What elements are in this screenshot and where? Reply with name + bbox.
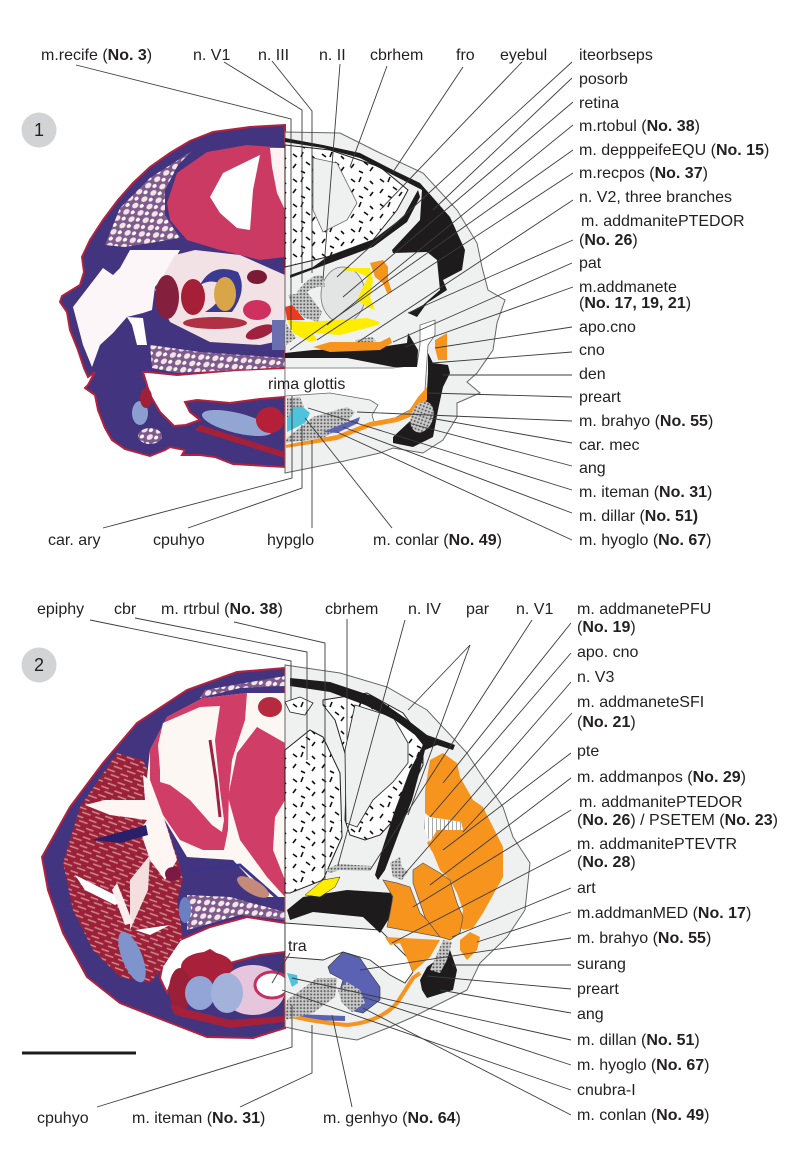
yellow muscle [305, 877, 340, 897]
label: cbr: cbr [114, 601, 137, 618]
label: m. addmanitePTEDOR: m. addmanitePTEDOR [579, 794, 743, 811]
label: m. depppeifeEQU: m. depppeifeEQU (No. 15) [579, 142, 769, 159]
label: ang: ang [577, 1006, 604, 1023]
label: m. conlan: m. conlan (No. 49) [577, 1107, 709, 1124]
eye ring [321, 267, 365, 323]
label: epiphy: epiphy [37, 601, 84, 618]
yellow muscles [287, 318, 380, 342]
orange muscles [370, 260, 392, 293]
mouth cavity [285, 923, 413, 983]
label: m. conlar: m. conlar (No. 49) [373, 532, 502, 549]
lower jaw cartilage [200, 405, 274, 441]
lower jaw lobe [132, 401, 148, 425]
label: m. addmanetePFU: m. addmanetePFU [577, 601, 711, 618]
label: m. addmanitePTEDOR: m. addmanitePTEDOR [581, 213, 745, 230]
panel number 2 [22, 648, 56, 682]
label: apo. cno: apo. cno [577, 644, 638, 661]
label: m. hyoglo: m. hyoglo (No. 67) [579, 532, 711, 549]
mouth cavity [285, 320, 435, 425]
label: tra: tra [288, 938, 307, 955]
label: iteorbseps: iteorbseps [579, 47, 653, 64]
label: m. addmanpos: m. addmanpos (No. 29) [577, 769, 746, 786]
label: n. V1: n. V1 [193, 47, 230, 64]
blue muscle [328, 952, 380, 1013]
label: ang: ang [579, 460, 606, 477]
stippled lower muscles [285, 407, 355, 443]
label: m. addmanetePFU [577, 601, 711, 636]
inner brain mass [228, 727, 285, 897]
labels panel 2 right [577, 601, 778, 1124]
white connective tissue [85, 775, 177, 880]
panel number 1 [22, 112, 56, 148]
label: m. hyoglo: m. hyoglo (No. 67) [577, 1057, 709, 1074]
label: cno: cno [579, 342, 605, 359]
blue cartilage [113, 928, 151, 986]
label: n. III: n. III [258, 47, 289, 64]
label: posorb: posorb [579, 71, 628, 88]
label: m.addmanMED: m.addmanMED (No. 17) [577, 905, 751, 922]
label: m.recpos: m.recpos (No. 37) [579, 165, 708, 182]
label: m. addmaneteSFI: m. addmaneteSFI [577, 694, 704, 711]
label: eyebul: eyebul [500, 47, 547, 64]
black parietal band [290, 678, 455, 880]
ventricle [210, 155, 260, 230]
label: n. V3: n. V3 [577, 669, 614, 686]
panel 1 schematic section [285, 132, 505, 473]
label: n. V1: n. V1 [516, 601, 553, 618]
label: cpuhyo: cpuhyo [37, 1110, 89, 1127]
blue muscle [323, 417, 360, 433]
label: cnubra-I: cnubra-I [577, 1082, 636, 1099]
leader lines panel 2 [90, 618, 572, 1115]
label: m. dillan: m. dillan (No. 51) [577, 1032, 700, 1049]
leader lines panel 1 [76, 61, 573, 540]
label: m. addmanitePTEDOR: (No. 26) [579, 232, 638, 249]
label: m. genhyo: m. genhyo (No. 64) [323, 1110, 461, 1127]
trachea [255, 972, 289, 998]
stippled tongue muscles [285, 978, 337, 1020]
black jaw cartilage [287, 890, 393, 933]
labels panel 1 right [579, 47, 769, 549]
label: m. addmanitePTEDOR: (No. 26) / PSETEM (No. 23) [577, 812, 778, 829]
white jaw joint space [73, 250, 180, 367]
red muscle [285, 305, 305, 320]
label: rima glottis: rima glottis [268, 376, 345, 393]
stippled eye muscles [288, 275, 325, 322]
panel 2 schematic section [285, 665, 530, 1040]
marrow [187, 895, 285, 930]
brain tissue [167, 145, 285, 260]
black cartilage band [285, 138, 465, 317]
black lower cartilage [420, 950, 457, 998]
label: car. ary: car. ary [48, 532, 100, 549]
label: preart: preart [577, 981, 619, 998]
jaw muscle [63, 753, 183, 983]
label: fro: fro [456, 47, 475, 64]
label: surang: surang [577, 956, 626, 973]
label: n. V2: n. V2, three branches [579, 189, 732, 206]
label: m. brahyo: m. brahyo (No. 55) [577, 930, 711, 947]
label: m.recife: m.recife (No. 3) [41, 47, 152, 64]
panel number 1: 1 [34, 120, 44, 140]
label: car. mec: car. mec [579, 437, 639, 454]
inner grey brain [313, 158, 357, 232]
cerebellum speckle [285, 730, 342, 893]
head silhouette [42, 668, 285, 1038]
label: m. iteman: m. iteman (No. 31) [579, 484, 712, 501]
labels panel 2 top [37, 601, 553, 618]
label: n. IV: n. IV [408, 601, 441, 618]
ventricle [158, 706, 224, 832]
label: m. dillar: m. dillar (No. 51) [579, 508, 698, 525]
upper jaw bone [150, 345, 285, 373]
label: m.rtobul: m.rtobul (No. 38) [579, 118, 700, 135]
label: pte: pte [577, 743, 599, 760]
label: pat: pat [579, 255, 602, 272]
label: par: par [466, 601, 490, 618]
tongue muscles [181, 952, 233, 982]
panel 1 histology section [60, 125, 285, 467]
cyan cartilage [287, 407, 310, 432]
label: art: art [577, 880, 596, 897]
panel 2 histology section [42, 668, 289, 1038]
label: preart: preart [579, 389, 621, 406]
cerebral hemisphere speckle [285, 145, 408, 267]
label: den: den [579, 366, 606, 383]
label: m. addmanetePFU: (No. 19) [577, 619, 636, 636]
panel number 2: 2 [34, 655, 44, 675]
outer pallium [150, 693, 247, 850]
eye region [155, 250, 285, 345]
labels panel 2 bottom [37, 938, 461, 1127]
stippled nerve [390, 857, 408, 880]
label: m.addmanete: (No. 17, 19, 21) [579, 295, 691, 312]
label: hypglo: hypglo [267, 532, 314, 549]
labels panel 1 top [41, 47, 547, 64]
label: m. addmaneteSFI [577, 694, 704, 731]
label: m. addmaneteSFI: (No. 21) [577, 714, 636, 731]
hatched pterygoid [424, 817, 463, 842]
label: cbrhem: cbrhem [325, 601, 378, 618]
label: m. addmanitePTEDOR [577, 794, 778, 829]
label: m. rtrbul: m. rtrbul (No. 38) [161, 601, 283, 618]
stippled brachiohyoid [430, 940, 452, 973]
label: cpuhyo: cpuhyo [153, 532, 205, 549]
orange adductor muscles [425, 753, 503, 930]
brain cavity background [147, 693, 285, 897]
labels panel 1 bottom [48, 376, 502, 549]
black jaw cartilage [285, 333, 418, 367]
eye remnant [190, 865, 285, 905]
head outline [285, 132, 505, 473]
head silhouette [60, 125, 285, 467]
label: m. addmanitePTEDOR [579, 213, 745, 249]
skull marrow [105, 151, 192, 247]
label: retina: retina [579, 95, 619, 112]
label: n. II: n. II [319, 47, 346, 64]
cerebral hemisphere speckle [323, 693, 423, 840]
label: m.addmanete: m.addmanete [579, 279, 677, 296]
label: m. brahyo: m. brahyo (No. 55) [579, 413, 713, 430]
label: m. addmanitePTEVTR: m. addmanitePTEVTR [577, 836, 737, 853]
label: m.addmanete [579, 279, 691, 312]
label: apo.cno: apo.cno [579, 319, 636, 336]
label: m. addmanitePTEVTR: (No. 28) [577, 854, 636, 871]
label: m. iteman: m. iteman (No. 31) [132, 1110, 265, 1127]
orange thin muscle [287, 973, 420, 1025]
scale bar [22, 1052, 136, 1054]
top skull marrow [200, 676, 285, 698]
cyan cartilage [287, 973, 298, 987]
inner grey brain [345, 705, 408, 827]
head outline [285, 665, 530, 1040]
label: m. addmanitePTEVTR [577, 836, 737, 871]
label: cbrhem: cbrhem [370, 47, 423, 64]
